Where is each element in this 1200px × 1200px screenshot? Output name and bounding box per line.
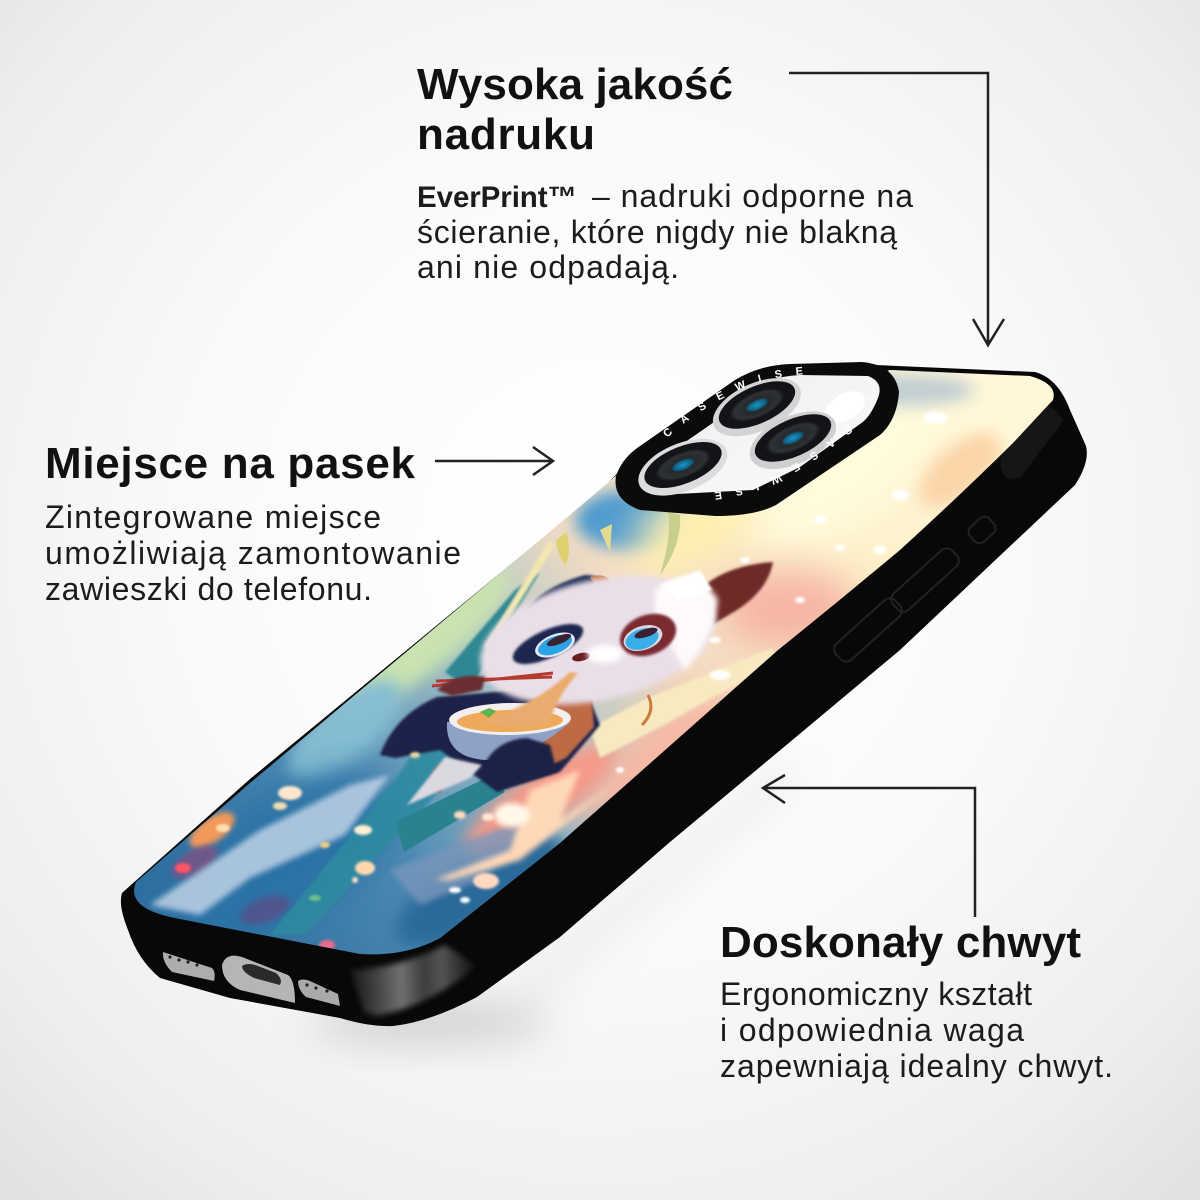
bump frame (616, 362, 899, 516)
fur highlight (655, 570, 718, 670)
lens top (704, 366, 810, 448)
description: EverPrint™ (417, 181, 577, 214)
leaves (556, 512, 680, 575)
printed artwork: panda eating noodles (134, 370, 1054, 954)
panda ears (529, 560, 775, 625)
blurred colour fields (137, 355, 1014, 977)
eye patches (510, 612, 678, 666)
muzzle glow (587, 645, 623, 663)
callout: print quality (417, 60, 913, 285)
arrow: to top of phone (789, 73, 1004, 345)
callout: strap slot (45, 439, 461, 607)
bokeh lights (175, 412, 947, 950)
right speaker grille (298, 980, 340, 1006)
heading (417, 60, 733, 159)
pale foreground shapes (150, 775, 555, 915)
heading: Miejsce na pasek (45, 439, 416, 488)
bottom edge gloss (350, 945, 476, 1016)
noodles lifted to mouth (480, 672, 578, 728)
description: Zintegrowane miejsce (45, 499, 381, 535)
brand text upper: CASEWISE (664, 366, 803, 436)
case body (121, 363, 1087, 1026)
left speaker grille (163, 952, 215, 981)
flash (819, 385, 871, 429)
phone in case (121, 363, 1087, 1026)
eyes (535, 625, 662, 658)
arrow: to strap slot (435, 447, 553, 475)
description: zawieszki do telefonu. (45, 571, 372, 607)
paw on bowl (483, 738, 557, 790)
callout: perfect grip (720, 918, 1113, 1084)
description: – nadruki odporne na (592, 178, 913, 214)
chopsticks (432, 673, 553, 686)
hand with chopsticks (437, 676, 485, 696)
description: zapewniają idealny chwyt. (720, 1048, 1113, 1084)
description (45, 499, 461, 607)
description (417, 178, 913, 285)
arrow: to phone side (763, 775, 975, 917)
art base (134, 370, 1054, 954)
description: i odpowiednia waga (720, 1012, 1024, 1048)
panda body (380, 690, 600, 805)
heading: Wysoka jakość (417, 60, 733, 109)
lens right (741, 400, 845, 481)
nose (572, 652, 590, 662)
side buttons (831, 514, 998, 665)
description: Ergonomiczny kształt (720, 976, 1032, 1012)
side grip highlight (1000, 405, 1064, 479)
description: ani nie odpadają. (417, 249, 679, 285)
description: umożliwiają zamontowanie (45, 535, 461, 571)
description (720, 976, 1113, 1084)
camera bump (616, 362, 899, 516)
lens left (630, 427, 735, 507)
heading: nadruku (417, 110, 595, 159)
bright glow lower (435, 770, 620, 880)
teal bamboo stalk (270, 543, 552, 935)
noodle bowl (447, 702, 571, 760)
heading: Doskonały chwyt (720, 918, 1081, 967)
charging port (222, 956, 295, 1003)
brand text lower: CASEWISE (714, 427, 852, 500)
description: ścieranie, które nigdy nie blakną (417, 214, 897, 250)
cream bamboo branch (590, 648, 780, 758)
phone drop shadow (310, 760, 800, 1044)
panda head (476, 574, 720, 709)
bump glass (639, 375, 880, 494)
